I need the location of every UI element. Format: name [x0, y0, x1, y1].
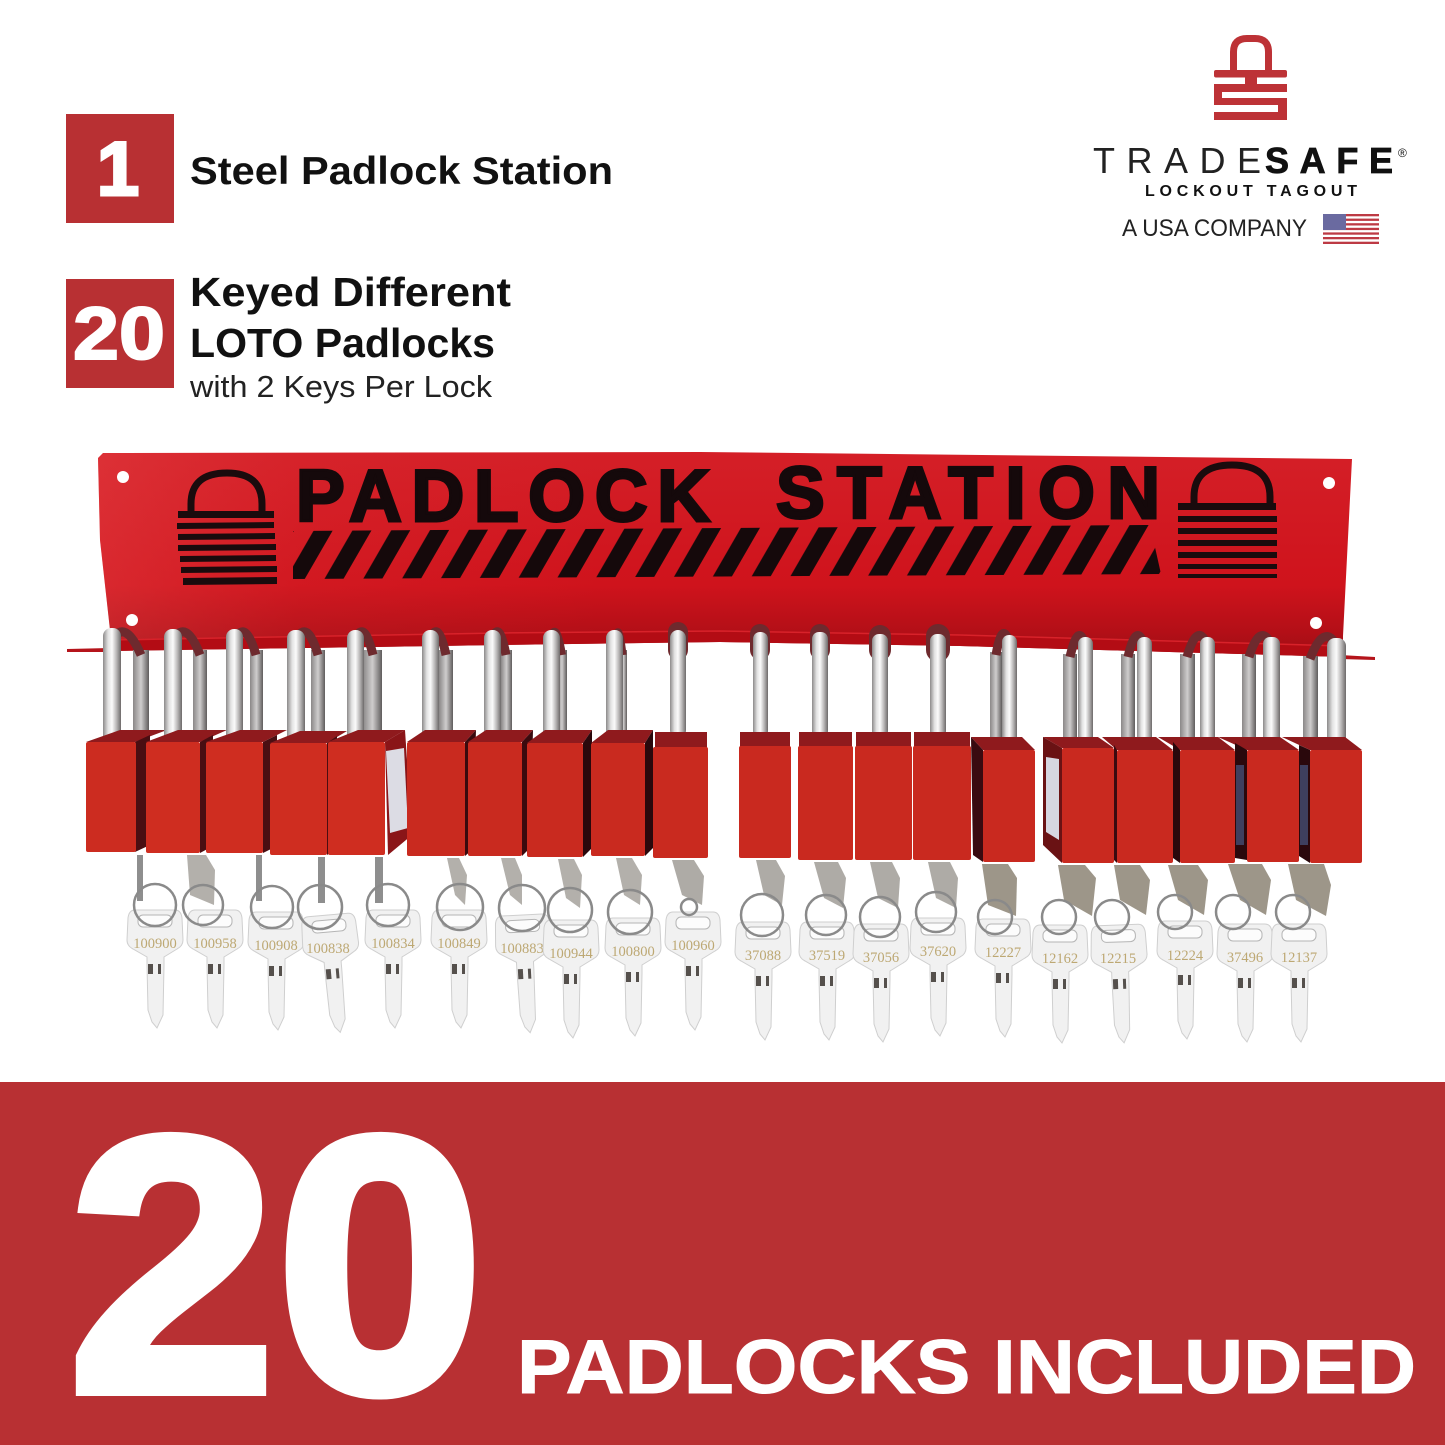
padlock 13: 37056	[863, 950, 899, 966]
padlock 18	[1157, 636, 1235, 1039]
logo wordmark: LOCKOUT TAGOUT	[1145, 183, 1357, 200]
logo: tradesafe	[1093, 38, 1407, 244]
icon: sign padlock left	[177, 473, 277, 585]
padlock 12	[798, 632, 855, 1040]
padlock 3: 100908	[254, 938, 298, 954]
padlock 2: 100958	[193, 936, 237, 952]
banner text: PADLOCKS INCLUDED	[517, 1325, 1416, 1410]
heading: steel padlock station: Steel Padlock Station	[190, 150, 613, 193]
padlock 6: 100849	[437, 936, 481, 952]
padlock 2	[146, 629, 243, 1028]
padlock 13	[853, 634, 912, 1042]
badge: 1	[66, 114, 174, 223]
padlock 8: 100944	[549, 946, 594, 962]
padlock 20	[1271, 637, 1362, 1042]
padlock 16: 12162	[1042, 951, 1078, 967]
logo wordmark: SAFE	[1265, 140, 1393, 181]
panel: padlock station sign	[67, 452, 1375, 660]
text block: keyed different padlocks: LOTO Padlocks	[190, 320, 495, 366]
padlock 10	[653, 630, 721, 1030]
padlock 1: 100900	[133, 936, 177, 952]
icon: us flag	[1323, 214, 1379, 244]
padlock 19	[1216, 636, 1299, 1042]
padlock 16	[1032, 636, 1114, 1043]
text block: keyed different padlocks: Keyed Different	[190, 269, 511, 315]
padlock 1	[86, 628, 183, 1028]
padlock 14	[910, 634, 971, 1036]
padlock 9	[591, 630, 661, 1036]
padlock 20: 12137	[1281, 950, 1317, 966]
padlock 5: 100834	[371, 936, 416, 952]
padlock 7: 100883	[500, 941, 544, 957]
padlock 17	[1090, 636, 1173, 1044]
padlock 4: 100838	[306, 941, 350, 957]
padlock 17: 12215	[1100, 951, 1136, 967]
padlock 8	[527, 630, 599, 1038]
logo wordmark	[1093, 140, 1407, 242]
sign title: PADLOCK	[296, 456, 710, 537]
text block: keyed different padlocks	[189, 269, 511, 404]
padlock 4	[270, 630, 366, 1035]
sign title	[296, 453, 1160, 537]
icon: sign padlock right	[1178, 465, 1277, 578]
padlock 11: 37088	[745, 948, 781, 964]
padlock 7	[468, 630, 556, 1034]
padlock 10: 100960	[671, 938, 715, 954]
padlock 18: 12224	[1167, 948, 1204, 964]
badge: 20: 20	[73, 292, 165, 375]
badge: 20	[66, 279, 174, 388]
logo wordmark: A USA COMPANY	[1122, 215, 1307, 242]
padlock 5	[328, 630, 421, 1028]
padlock 15	[971, 634, 1035, 1037]
padlock 12: 37519	[809, 948, 845, 964]
logo wordmark: TRADE	[1093, 140, 1261, 181]
text block: keyed different padlocks: with 2 Keys Per Lock	[189, 369, 493, 404]
badge: 1: 1	[97, 127, 139, 212]
padlock 9: 100800	[611, 944, 655, 960]
padlock 15: 12227	[985, 945, 1021, 961]
hazard stripes	[293, 525, 1161, 579]
padlock 19: 37496	[1227, 950, 1263, 966]
padlock 6	[407, 630, 487, 1028]
padlock 11	[735, 632, 791, 1040]
icon: logo padlock	[1214, 38, 1287, 120]
padlock 14: 37620	[920, 944, 956, 960]
banner: padlocks included	[0, 1062, 1445, 1445]
sign title: STATION	[776, 453, 1160, 534]
padlock 3	[206, 629, 304, 1030]
logo wordmark: ®	[1398, 146, 1407, 160]
